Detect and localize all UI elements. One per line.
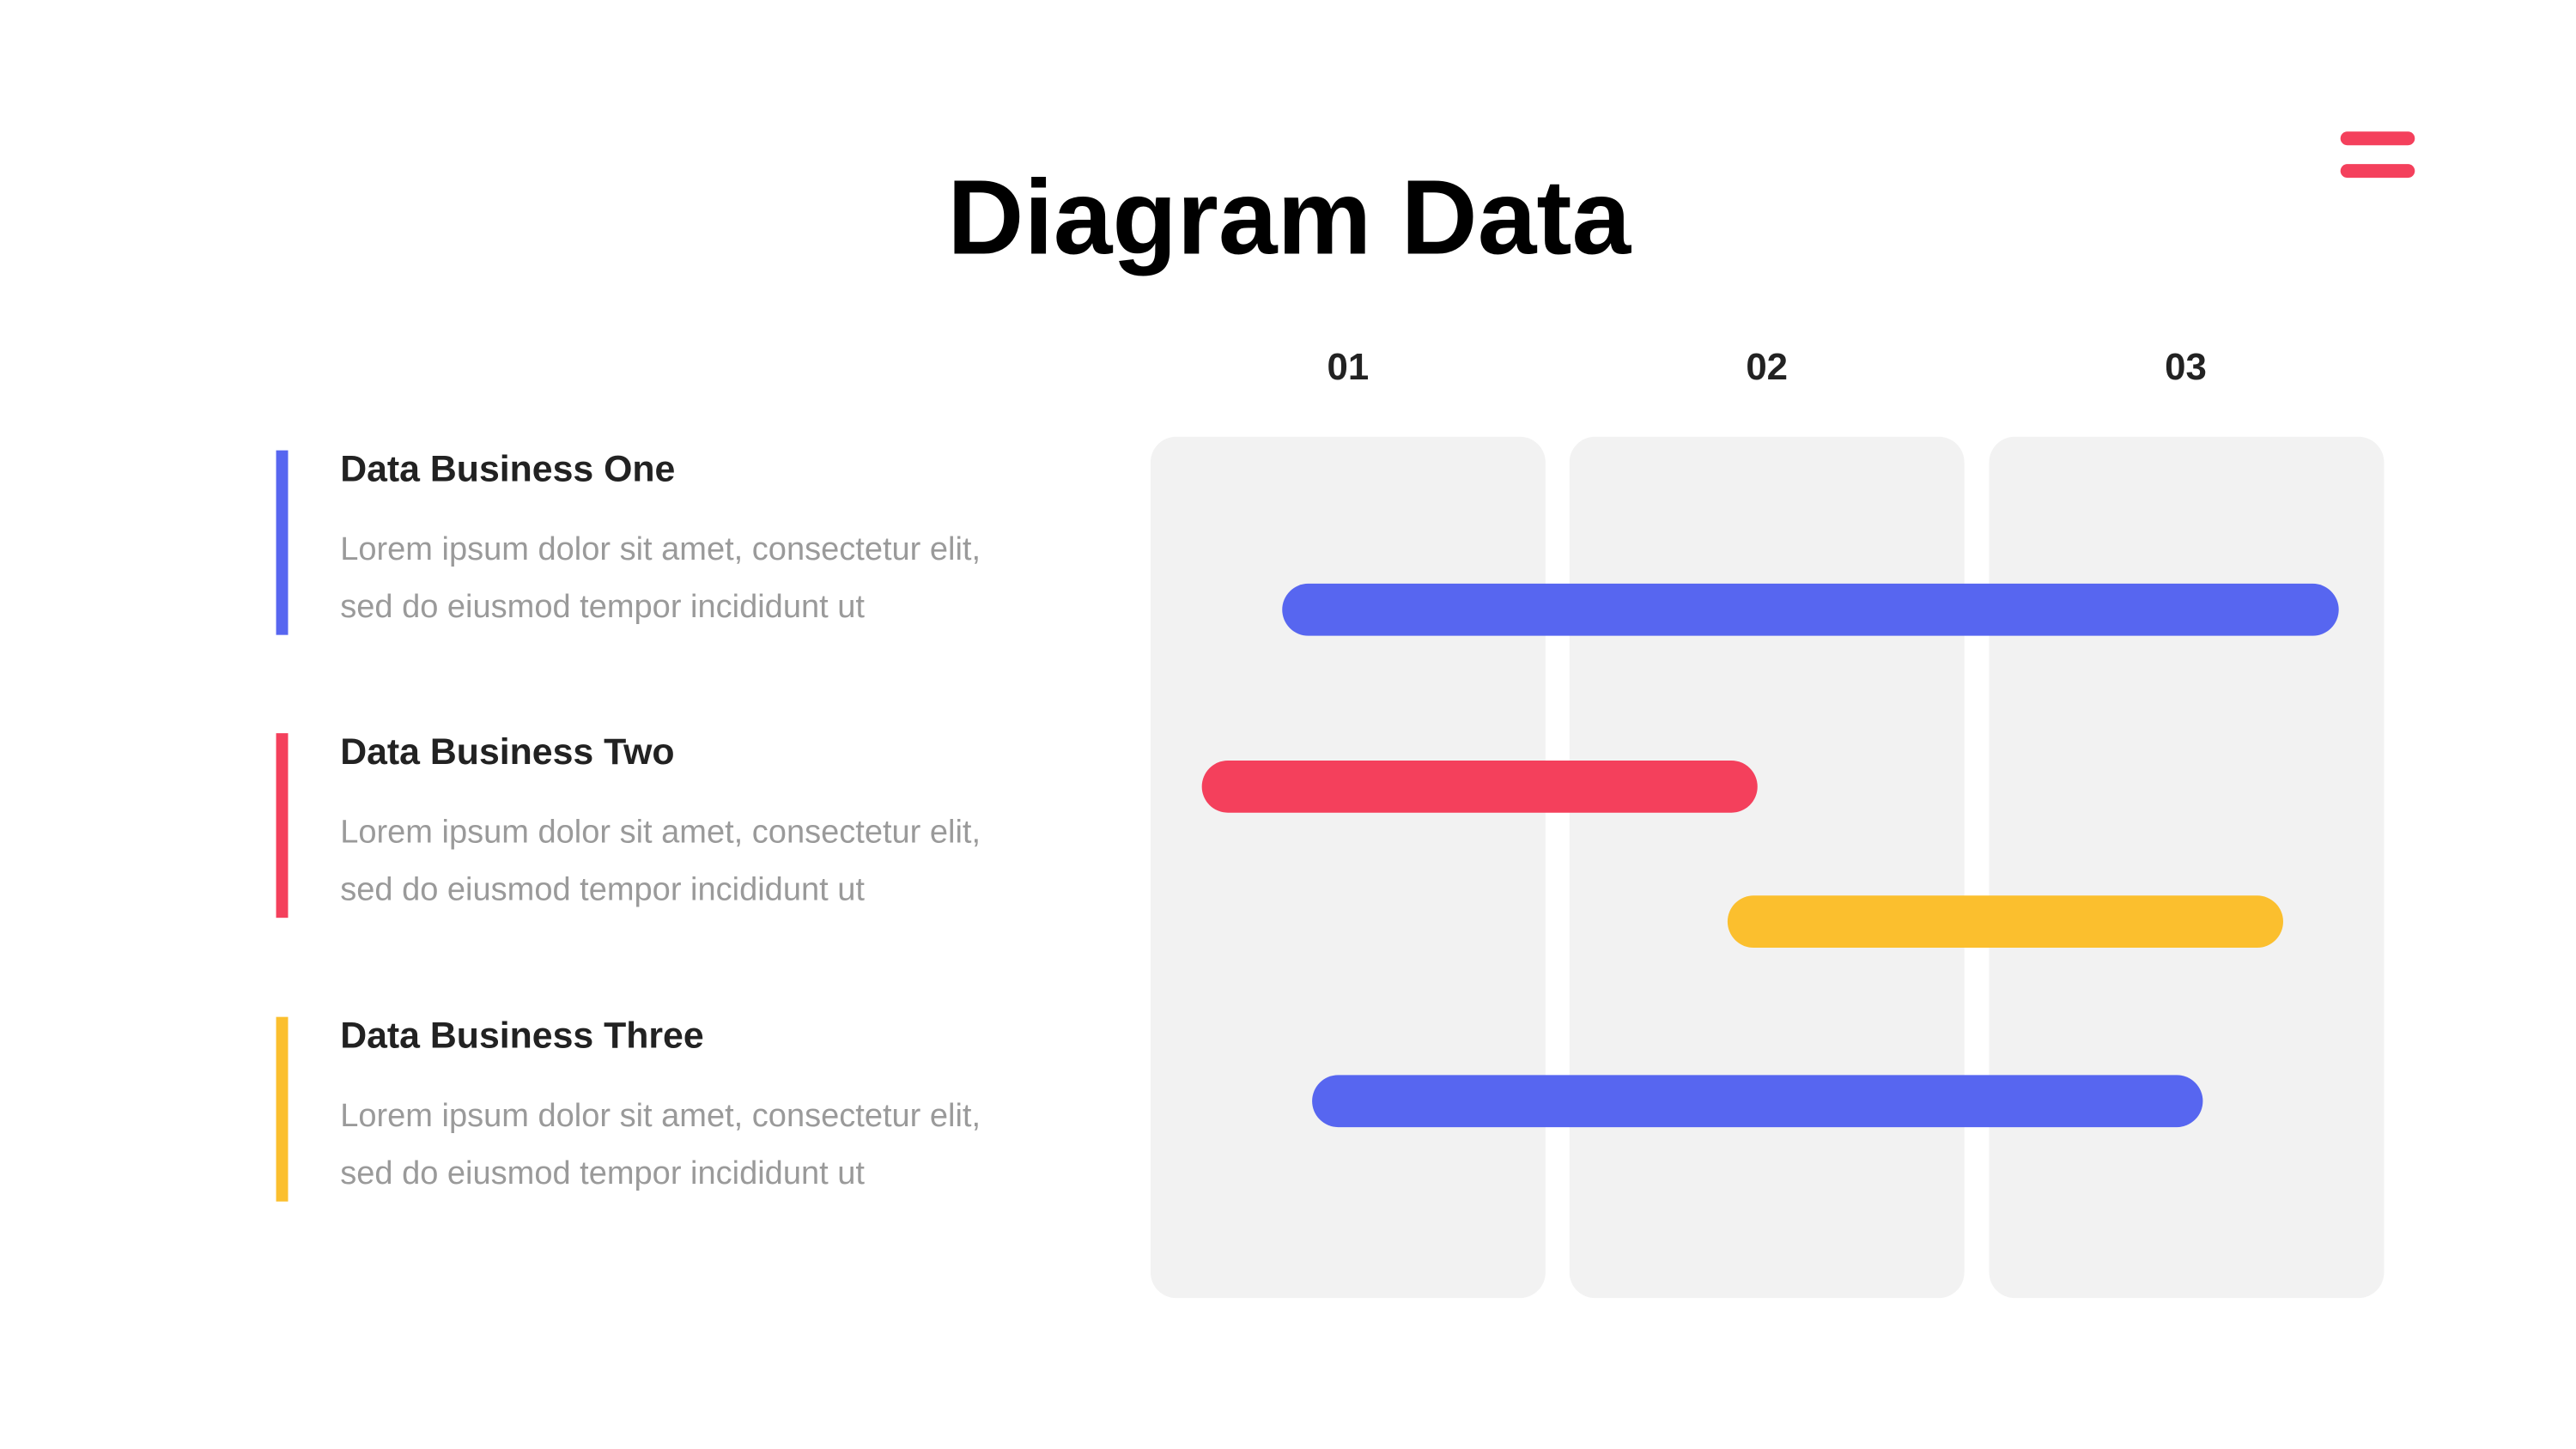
bar: red <box>1202 761 1758 813</box>
column 1 <box>1151 437 1546 1298</box>
title: Diagram Data <box>947 159 1631 277</box>
item: Data Business Three: Data Business Three <box>340 1016 704 1056</box>
column label 01: 01 <box>1327 346 1369 388</box>
column label 02: 02 <box>1746 346 1788 388</box>
icon: menu <box>2341 131 2415 179</box>
column 3 <box>1990 437 2384 1298</box>
item: Data Business One: sed do eiusmod tempor incididunt ut <box>340 588 865 625</box>
item: Data Business One <box>276 449 981 635</box>
item: Data Business Two: Data Business Two <box>340 731 675 773</box>
item: Data Business One: Lorem ipsum dolor sit amet, consectetur elit, <box>340 530 981 567</box>
item: Data Business Two: Lorem ipsum dolor sit amet, consectetur elit, <box>340 814 981 851</box>
item: Data Business Two <box>276 731 981 919</box>
item: Data Business Three: sed do eiusmod tempor incididunt ut <box>340 1155 865 1191</box>
bar: yellow <box>1728 895 2283 948</box>
item: Data Business Two: sed do eiusmod tempor incididunt ut <box>340 870 865 907</box>
column 2 <box>1570 437 1965 1298</box>
item: Data Business Three: Lorem ipsum dolor sit amet, consectetur elit, <box>340 1097 981 1134</box>
column label 03: 03 <box>2165 346 2207 388</box>
item: Data Business One: Data Business One <box>340 449 675 489</box>
item: Data Business Three <box>276 1016 981 1202</box>
chart: gantt <box>1151 346 2384 1298</box>
bar: blue 2 <box>1312 1075 2202 1127</box>
bar: blue 1 <box>1282 584 2339 636</box>
